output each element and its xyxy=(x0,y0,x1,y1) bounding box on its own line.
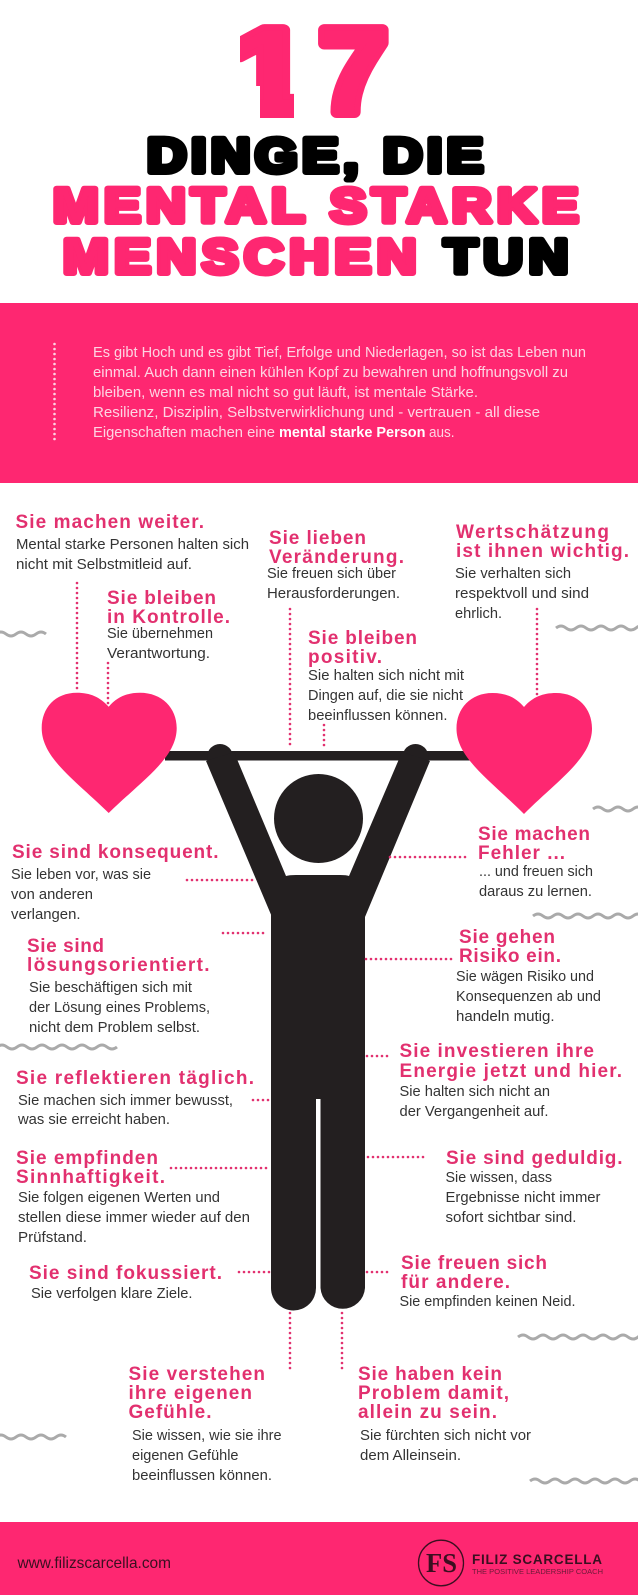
text block: Sie freuen sich für andere xyxy=(400,1253,576,1310)
text block: Sie sind fokussiert: Sie verfolgen klare Ziele. xyxy=(31,1285,192,1302)
text block: Sie freuen sich für andere: Sie freuen sich xyxy=(401,1253,547,1274)
text block: Sie empfinden Sinnhaftigkeit: stellen diese immer wieder auf den xyxy=(18,1209,250,1226)
text block: Sie bleiben positiv: positiv. xyxy=(308,647,382,668)
text block: Sie bleiben positiv xyxy=(308,628,465,724)
title: MENSCHEN xyxy=(63,229,416,283)
text block: Sie sind fokussiert xyxy=(29,1263,222,1302)
text block: Sie sind lösungsorientiert: nicht dem Problem selbst. xyxy=(29,1019,200,1036)
text block: Sie sind lösungsorientiert: Sie sind xyxy=(27,936,104,957)
connector: Sie sind geduldig xyxy=(368,1156,428,1158)
panel: intro band: Es gibt Hoch und es gibt Tief, Erfolge und Niederlagen, so ist das Leben nun xyxy=(93,344,586,361)
text block: Sie machen weiter: Mental starke Personen halten sich xyxy=(16,536,249,553)
text block: Sie sind lösungsorientiert xyxy=(27,936,210,1036)
logo: FS monogram xyxy=(418,1540,464,1586)
text block: Sie investieren ihre Energie: Sie halten sich nicht an xyxy=(400,1083,550,1100)
text block: Wertschätzung ist ihnen wichtig xyxy=(455,522,629,622)
text block: Sie verstehen ihre eigenen Gefühle xyxy=(128,1364,282,1484)
text block: Sie verstehen ihre eigenen Gefühle: Sie wissen, wie sie ihre xyxy=(132,1427,282,1444)
text block: Sie reflektieren täglich xyxy=(16,1068,254,1128)
text block: Sie verstehen ihre eigenen Gefühle: beeinflussen können. xyxy=(132,1467,272,1484)
connector: Sie empfinden Sinnhaftigkeit xyxy=(171,1167,270,1169)
connector: Sie sind fokussiert xyxy=(239,1271,270,1273)
text block: Sie gehen Risiko ein: handeln mutig. xyxy=(456,1008,554,1025)
text block: Sie verstehen ihre eigenen Gefühle: ihre eigenen xyxy=(128,1383,252,1404)
text block: Sie verstehen ihre eigenen Gefühle: Gefühle. xyxy=(128,1402,212,1423)
text block: Wertschätzung ist ihnen wichtig: respektvoll und sind xyxy=(455,585,589,602)
title: 7 xyxy=(319,4,388,137)
text block: Sie sind konsequent: von anderen xyxy=(11,886,93,903)
text block: Sie bleiben in Kontrolle: Sie übernehmen xyxy=(107,625,213,642)
connector: Sie investieren ihre Energie xyxy=(367,1055,391,1057)
text block: Sie lieben Veränderung: Herausforderungen. xyxy=(267,585,400,602)
text block: Wertschätzung ist ihnen wichtig: ist ihnen wichtig. xyxy=(456,541,629,562)
text block: Sie machen Fehler: daraus zu lernen. xyxy=(479,883,592,900)
icon: right heart xyxy=(456,693,592,814)
connector: Sie sind lösungsorientiert xyxy=(223,932,268,934)
text block: Sie bleiben positiv: Dingen auf, die sie nicht xyxy=(308,687,464,704)
text block: Wertschätzung ist ihnen wichtig: Wertschätzung xyxy=(456,522,609,543)
text block: Sie bleiben positiv: Sie bleiben xyxy=(308,628,417,649)
text block: Sie empfinden Sinnhaftigkeit: Prüfstand. xyxy=(18,1229,87,1246)
text block: Sie sind geduldig: Ergebnisse nicht immer xyxy=(446,1189,600,1206)
text block: Sie sind konsequent: verlangen. xyxy=(11,906,80,923)
text block: Sie machen weiter: nicht mit Selbstmitleid auf. xyxy=(16,556,192,573)
text block: Sie investieren ihre Energie xyxy=(400,1041,622,1120)
panel: intro band: bleiben, wenn es mal nicht so gut läuft, ist mentale Stärke. xyxy=(93,384,478,401)
panel: intro band: Resilienz, Disziplin, Selbstverwirklichung und - vertrauen - all diese xyxy=(93,404,540,421)
panel: intro band: mental starke Person xyxy=(279,424,426,441)
panel: intro band: aus. xyxy=(429,424,454,441)
text block: Sie machen Fehler: ... und freuen sich xyxy=(479,863,593,880)
text block: Sie sind geduldig: sofort sichtbar sind. xyxy=(446,1209,576,1226)
text block: Sie sind konsequent: Sie leben vor, was sie xyxy=(11,866,151,883)
text block: Sie gehen Risiko ein xyxy=(456,927,601,1025)
title: TUN xyxy=(444,229,568,283)
text block: Sie lieben Veränderung: Sie lieben xyxy=(269,528,366,549)
text block: Sie sind geduldig: Sie sind geduldig. xyxy=(446,1148,622,1169)
text block: Sie reflektieren täglich: Sie machen sich immer bewusst, xyxy=(18,1092,233,1109)
text block: Sie empfinden Sinnhaftigkeit: Sinnhaftigkeit. xyxy=(16,1167,165,1188)
text block: Sie freuen sich für andere: Sie empfinden keinen Neid. xyxy=(400,1293,576,1310)
figure: person lifting barbell xyxy=(165,744,470,1310)
text block: Sie machen Fehler: Fehler ... xyxy=(478,843,565,864)
connector: Sie gehen Risiko ein xyxy=(366,958,452,960)
connector: Sie bleiben in Kontrolle xyxy=(107,663,109,705)
text block: Sie sind konsequent xyxy=(11,842,218,923)
panel: intro band: Eigenschaften machen eine xyxy=(93,424,275,441)
text block: Sie lieben Veränderung xyxy=(267,528,404,602)
text block: Sie verstehen ihre eigenen Gefühle: Sie verstehen xyxy=(128,1364,265,1385)
brand name: FILIZ SCARCELLA xyxy=(472,1552,602,1567)
connector: Sie reflektieren täglich xyxy=(253,1099,270,1101)
text block: Sie freuen sich für andere: für andere. xyxy=(401,1272,510,1293)
text block: Sie haben kein Problem damit: Sie fürchten sich nicht vor xyxy=(360,1427,531,1444)
connector: Wertschätzung xyxy=(536,609,538,697)
text block: Wertschätzung ist ihnen wichtig: ehrlich. xyxy=(455,605,502,622)
text block: Sie empfinden Sinnhaftigkeit xyxy=(16,1148,250,1246)
brand name: THE POSITIVE LEADERSHIP COACH xyxy=(472,1567,603,1576)
connector: Sie verstehen ihre Gefühle xyxy=(289,1313,291,1371)
text block: Sie sind geduldig xyxy=(446,1148,622,1226)
text block: Sie bleiben positiv: Sie halten sich nicht mit xyxy=(308,667,465,684)
connector: Sie machen weiter xyxy=(76,583,78,692)
logo: FS monogram: FS xyxy=(426,1548,457,1578)
text block: Sie gehen Risiko ein: Konsequenzen ab und xyxy=(456,988,601,1005)
text block: Sie haben kein Problem damit: dem Alleinsein. xyxy=(360,1447,461,1464)
text block: Sie gehen Risiko ein: Sie gehen xyxy=(459,927,555,948)
text block: Sie sind lösungsorientiert: Sie beschäftigen sich mit xyxy=(29,979,193,996)
title: MENTAL STARKE xyxy=(53,178,579,232)
connector: Sie freuen sich für andere xyxy=(367,1271,391,1273)
connector: Sie machen Fehler xyxy=(390,856,466,858)
text block: Sie bleiben in Kontrolle: Verantwortung. xyxy=(107,645,210,662)
panel: intro band: einmal. Auch dann einen kühlen Kopf zu bewahren und hoffnungsvoll zu xyxy=(93,364,568,381)
text block: Sie haben kein Problem damit xyxy=(358,1364,531,1464)
website url: www.filizscarcella.com xyxy=(17,1555,171,1572)
text block: Sie machen weiter: Sie machen weiter. xyxy=(16,512,204,533)
text block: Sie empfinden Sinnhaftigkeit: Sie empfinden xyxy=(16,1148,158,1169)
text block: Sie gehen Risiko ein: Sie wägen Risiko und xyxy=(456,968,594,985)
text block: Sie reflektieren täglich: Sie reflektieren täglich. xyxy=(16,1068,254,1089)
title xyxy=(53,4,579,283)
text block: Sie bleiben positiv: beeinflussen können. xyxy=(308,707,448,724)
icon: left heart xyxy=(42,693,177,813)
panel: footer xyxy=(0,1522,638,1595)
text block: Sie sind lösungsorientiert: der Lösung eines Problems, xyxy=(29,999,210,1016)
text block: Sie machen weiter xyxy=(16,512,249,573)
text block: Sie machen Fehler xyxy=(478,824,593,900)
text block: Sie empfinden Sinnhaftigkeit: Sie folgen eigenen Werten und xyxy=(18,1189,220,1206)
text block: Sie sind lösungsorientiert: lösungsorientiert. xyxy=(27,955,210,976)
text block: Sie haben kein Problem damit: Problem damit, xyxy=(358,1383,509,1404)
text block: Sie bleiben in Kontrolle: in Kontrolle. xyxy=(107,607,230,628)
connector: Sie bleiben positiv xyxy=(323,725,325,750)
text block: Sie sind fokussiert: Sie sind fokussiert. xyxy=(29,1263,222,1284)
connector: Sie haben kein Problem xyxy=(341,1313,343,1371)
squiggle lines xyxy=(0,626,638,1483)
text block: Sie investieren ihre Energie: der Vergangenheit auf. xyxy=(400,1103,548,1120)
text block: Sie verstehen ihre eigenen Gefühle: eigenen Gefühle xyxy=(132,1447,238,1464)
text block: Sie sind konsequent: Sie sind konsequent. xyxy=(12,842,218,863)
connector: Sie lieben Veränderung xyxy=(289,609,291,748)
text block: Sie investieren ihre Energie: Sie investieren ihre xyxy=(400,1041,594,1062)
text block: Sie reflektieren täglich: was sie erreicht haben. xyxy=(17,1111,170,1128)
text block: Sie investieren ihre Energie: Energie jetzt und hier. xyxy=(400,1061,622,1082)
text block: Sie gehen Risiko ein: Risiko ein. xyxy=(459,946,561,967)
text block: Sie haben kein Problem damit: allein zu sein. xyxy=(358,1402,497,1423)
title: DINGE, DIE xyxy=(147,128,483,182)
text block: Wertschätzung ist ihnen wichtig: Sie verhalten sich xyxy=(455,565,571,582)
text block: Sie lieben Veränderung: Veränderung. xyxy=(269,547,404,568)
brand name xyxy=(472,1552,603,1576)
text block: Sie lieben Veränderung: Sie freuen sich über xyxy=(267,565,396,582)
text block: Sie bleiben in Kontrolle xyxy=(107,588,230,662)
text block: Sie machen Fehler: Sie machen xyxy=(478,824,590,845)
panel: intro band xyxy=(0,303,638,483)
title: 1 xyxy=(230,4,309,137)
text block: Sie sind geduldig: Sie wissen, dass xyxy=(446,1169,552,1186)
connector: Sie sind konsequent xyxy=(187,879,253,881)
text block: Sie haben kein Problem damit: Sie haben kein xyxy=(358,1364,502,1385)
text block: Sie bleiben in Kontrolle: Sie bleiben xyxy=(107,588,216,609)
